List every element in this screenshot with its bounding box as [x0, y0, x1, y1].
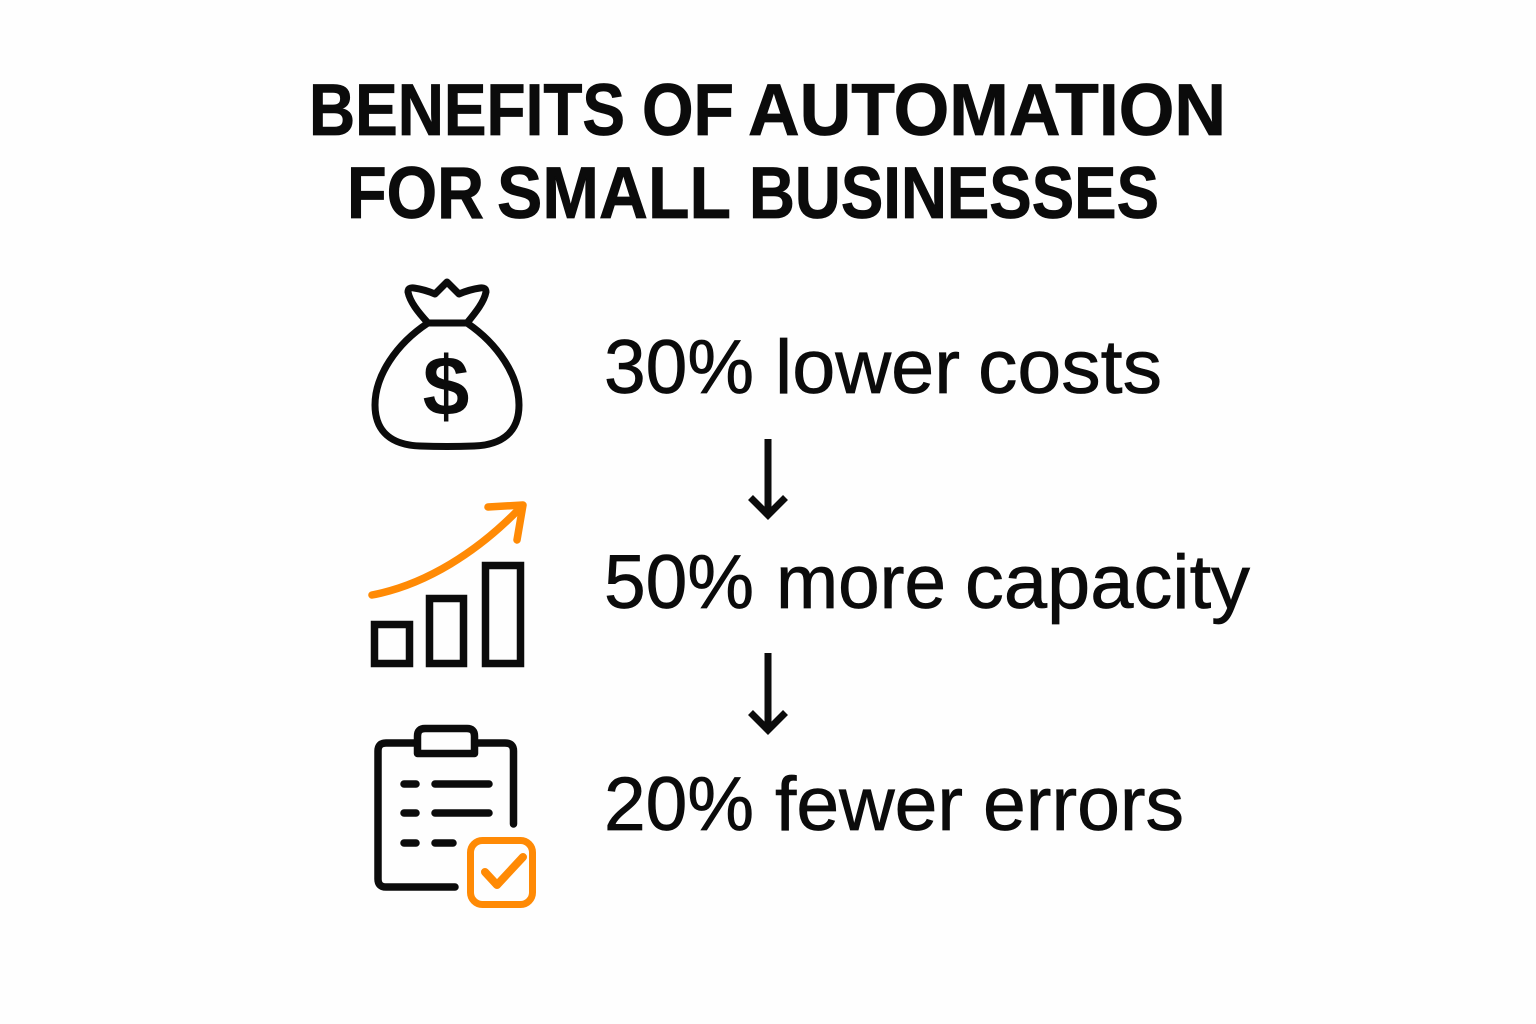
icon: money bag [375, 282, 519, 446]
bars [374, 566, 520, 664]
text: 20% fewer errors: fewer [775, 762, 963, 847]
text: 30% lower costs [604, 325, 1162, 410]
text: 30% lower costs: 30% [604, 325, 754, 410]
clipboard [378, 728, 514, 887]
arrow: capacity to errors [750, 653, 786, 730]
text: 50% more capacity: 50% [604, 540, 754, 625]
icon: clipboard checklist [378, 728, 532, 904]
growth arrow [372, 505, 523, 595]
icon: growth chart [372, 505, 523, 664]
title: SMALL [497, 153, 731, 234]
title: BUSINESSES [749, 153, 1159, 234]
text: 30% lower costs: costs [978, 325, 1162, 410]
title: OF [642, 70, 734, 151]
title: BENEFITS [309, 70, 625, 151]
text: 20% fewer errors: 20% [604, 762, 754, 847]
title [309, 70, 1226, 234]
text: 20% fewer errors: errors [983, 762, 1184, 847]
text: 30% lower costs: lower [775, 325, 960, 410]
title: FOR [347, 153, 484, 234]
orange checkbox [470, 840, 532, 904]
icon: money bag: $ [423, 339, 469, 433]
title: AUTOMATION [748, 70, 1226, 151]
text: 20% fewer errors [604, 762, 1184, 847]
text: 50% more capacity: capacity [965, 540, 1250, 625]
arrow: costs to capacity [750, 439, 786, 515]
text: 50% more capacity [604, 540, 1250, 625]
text: 50% more capacity: more [776, 540, 946, 625]
